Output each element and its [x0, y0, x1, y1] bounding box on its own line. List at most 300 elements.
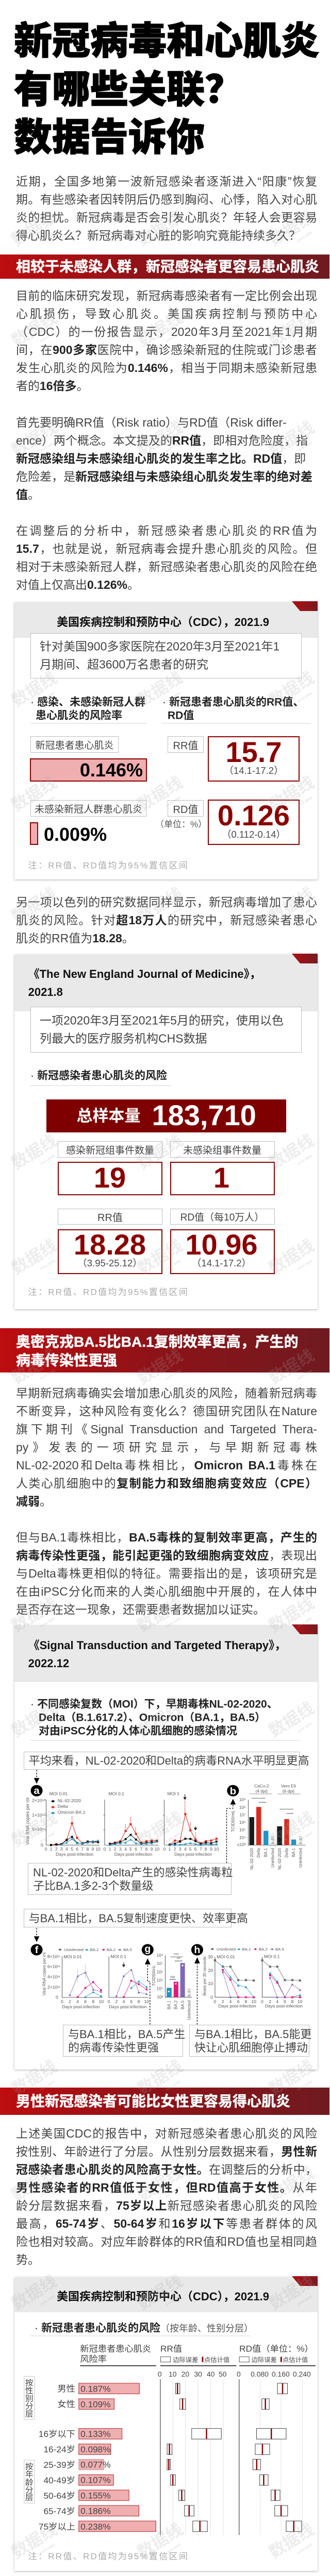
text: Israel study: [16, 895, 317, 945]
line charts f: 8: [138, 1999, 140, 2004]
bar chart g: TCID50/mL: [152, 1965, 156, 1986]
line chart MOI 0.1: 10: [155, 1846, 159, 1852]
text: BA.5: 与Delta毒株更相似的特征。需要指出的是，该项研究是: [16, 1566, 317, 1580]
watermarks: 数据线: [134, 2163, 186, 2205]
line chart MOI 0.01: Viral RNA copies per ml: [25, 1798, 30, 1845]
text: adjusted analysis: 相对于未感染新冠人群，新冠感染者患心肌炎的风险在绝: [16, 560, 317, 573]
icon h: h: [194, 1945, 200, 1956]
line chart MOI 0.01: NL-02-2020: [58, 1798, 81, 1803]
panel: Signal Transduction 2022.12: [14, 1625, 318, 2070]
title: [13, 20, 320, 159]
watermarks: DATA WIRE: [40, 692, 56, 703]
subheading: 新冠患者患心肌炎的风险（按年龄、性别分层）: [41, 2323, 253, 2334]
section heading 3: 男性新冠感染者可能比女性更容易得心肌炎: [16, 2093, 290, 2109]
watermarks: 数据线: [134, 668, 186, 710]
table headers: 0.240: [293, 2370, 311, 2378]
watermarks: DATA WIRE: [40, 1260, 56, 1271]
watermarks: 数据线: [134, 1346, 186, 1387]
line chart MOI 1: 5: [189, 1846, 192, 1852]
bar chart g: ns: [170, 1975, 175, 1979]
row: female: 0.109%: [80, 2400, 111, 2409]
watermarks: DATA WIRE: [297, 1260, 313, 1271]
label: RD值（每10万人）: [180, 1212, 264, 1223]
row: 25-39: 25-39岁: [43, 2460, 75, 2470]
total sample: [46, 1099, 286, 1132]
subheading: ·: [35, 2323, 38, 2334]
text: CDC report: 间，在900多家医院中，确诊感染新冠的住院或门诊患者: [16, 343, 317, 357]
text: sex and age: 冠感染者患心肌炎的风险高于女性。在调整后的分析中，: [16, 2163, 317, 2176]
subheading: ·: [30, 1070, 34, 1082]
watermarks: 数据线: [266, 1594, 317, 1635]
bar chart g: 10⁵: [157, 1978, 163, 1982]
line charts h: BA.2: [259, 1947, 268, 1952]
bar: uninfected 0.009%: [30, 822, 38, 845]
side label: by sex: [24, 2376, 35, 2419]
table headers: 新冠患者患心肌炎: [80, 2344, 151, 2354]
table headers: 边际误差: [252, 2357, 277, 2363]
line charts h: 0: [214, 1999, 217, 2004]
line charts h: 10: [251, 1999, 256, 2004]
watermarks: DATA WIRE: [297, 2295, 313, 2307]
value 1: 1: [213, 1161, 229, 1194]
callout: infectivity: 与BA.1相比，BA.5产生: [68, 2028, 185, 2041]
watermarks: 数据线: [266, 1131, 317, 1173]
study description: 一项2020年3月至2021年5月的研究，使用以色: [40, 1014, 284, 1027]
icon a: a: [34, 1785, 40, 1797]
text: BA.5: 在由iPSC分化而来的人类心肌细胞中开展的，在人体中: [16, 1585, 317, 1598]
line chart MOI 1: 0: [163, 1846, 166, 1852]
watermarks: DATA WIRE: [297, 2080, 313, 2092]
line charts f: 10: [99, 1999, 104, 2004]
watermarks: 数据线: [266, 1346, 317, 1387]
callout: beating: 快让心肌细胞停止搏动: [194, 2041, 308, 2054]
value 1: [170, 1162, 274, 1195]
line charts f: BA.2: [107, 1947, 116, 1952]
callout: beating: [189, 2025, 309, 2057]
value 19: [58, 1162, 162, 1195]
line charts h: BA.1: [242, 1947, 251, 1952]
bar chart b: NL-02-2020: [250, 1848, 254, 1870]
arrow to chart g: [145, 1958, 151, 2025]
watermarks: 数据线: [266, 208, 317, 249]
text: CDC report: 心肌损伤，导致心肌炎。美国疾病控制与预防中心: [16, 307, 317, 320]
line chart MOI 0.01: 2: [55, 1846, 58, 1852]
text: Israel study: 肌炎的风险。针对超18万人的研究中，新冠感染者患心: [16, 913, 317, 926]
table headers: 0.080: [251, 2370, 269, 2378]
line charts f: MOI 0.01: [63, 1954, 82, 1959]
intro text: 期。有些感染者因转阴后仍感到胸闷、心悸，陷入对心肌: [16, 193, 317, 206]
watermarks: DATA WIRE: [40, 2187, 56, 2198]
value RD: （0.112-0.14）: [222, 829, 286, 840]
bar chart b: 10⁶: [239, 1820, 246, 1825]
watermarks: DATA WIRE: [166, 442, 182, 453]
line charts h: Beats per 30 seconds: [202, 1956, 207, 1996]
line chart MOI 1: 4: [184, 1846, 187, 1852]
watermarks: DATA WIRE: [297, 231, 313, 243]
row: under 16: 0.133%: [80, 2429, 111, 2439]
bar chart g: **: [177, 1957, 180, 1961]
watermarks: DATA WIRE: [166, 2080, 182, 2092]
watermarks: DATA WIRE: [40, 1617, 56, 1629]
callout: RNA: 平均来看，NL-02-2020和Delta的病毒RNA水平明显更高: [29, 1754, 309, 1767]
subheading: 新冠感染者患心肌炎的风险: [37, 1070, 167, 1082]
text: CDC report: （CDC）的一份报告显示，2020年3月至2021年1月期: [16, 325, 317, 338]
row: 65-74: 65-74岁: [43, 2506, 75, 2516]
watermarks: DATA WIRE: [40, 332, 56, 343]
icon h: [191, 1944, 203, 1956]
bar chart b: Delta: [284, 1848, 289, 1858]
value RR: （14.1-17.2）: [224, 765, 284, 776]
section heading 1: 相较于未感染人群，新冠感染者更容易患心肌炎: [16, 259, 319, 275]
watermarks: DATA WIRE: [166, 796, 182, 808]
row: female: [57, 2399, 269, 2409]
section heading 2: [0, 1328, 329, 1372]
total sample: 183,710: [152, 1099, 256, 1131]
value 10.96: 10.96: [185, 1228, 258, 1261]
line chart MOI 0.01: 6: [76, 1846, 78, 1852]
bar chart b: 10⁴: [239, 1835, 246, 1840]
line charts f: BA.1: [90, 1947, 99, 1952]
text: CDC report: 发生心肌炎的风险为0.146%，相当于同期未感染新冠患: [16, 361, 317, 375]
watermarks: DATA WIRE: [166, 1832, 182, 1843]
text: RR and RD definitions: ence）两个概念。本文提及的RR值，即相对危险度，指: [16, 434, 308, 447]
callout: infectious particles: [28, 1863, 231, 1895]
watermarks: 数据线: [8, 884, 60, 926]
bar chart g: BA.1: [167, 2000, 171, 2009]
table headers: 0: [158, 2370, 162, 2378]
line charts h: 0: [210, 1995, 213, 1999]
watermarks: 数据线: [8, 1699, 60, 1740]
text: RR and RD definitions: 新冠感染组与未感染组心肌炎的发生率之比。RD值，即: [16, 452, 306, 465]
note: 注：RR值、RD值均为95%置信区间: [28, 2551, 189, 2562]
icon g: g: [144, 1944, 151, 1955]
callout: infectious particles: 子比BA.1多2-3个数量级: [33, 1879, 154, 1892]
note: 注：RR值、RD值均为95%置信区间: [28, 1287, 189, 1297]
watermarks: 数据线: [8, 1594, 60, 1635]
table headers: 30: [194, 2370, 202, 2378]
icon f: f: [35, 1945, 39, 1956]
value 18.28: 18.28: [74, 1228, 146, 1261]
row: 65-74: 0.186%: [80, 2506, 111, 2516]
line charts f: 0: [56, 1995, 58, 2000]
watermarks: 数据线: [134, 1594, 186, 1635]
watermarks: DATA WIRE: [297, 692, 313, 703]
line chart MOI 0.1: 0: [104, 1846, 106, 1852]
watermarks: 数据线: [266, 2163, 317, 2205]
line chart MOI 0.01: 0: [41, 1842, 43, 1848]
line chart MOI 0.01: [25, 1791, 101, 1857]
intro text: [16, 174, 317, 242]
callout: infectivity: [63, 2025, 183, 2057]
line chart MOI 0.1: Days post-infection: [114, 1852, 152, 1857]
line charts f: 6×10¹¹: [47, 1964, 60, 1969]
line chart MOI 1: 10: [214, 1846, 219, 1852]
line charts f: [42, 1947, 149, 2009]
watermarks: 数据线: [8, 2163, 60, 2205]
title: 新冠病毒和心肌炎: [14, 20, 319, 62]
panel heading: 《The New England Journal of Medicine》，: [28, 968, 261, 980]
watermarks: DATA WIRE: [166, 2187, 182, 2198]
label: 感染新冠组事件数量: [66, 1145, 154, 1156]
callout: RNA: [24, 1752, 300, 1770]
row: 25-39: [43, 2459, 260, 2470]
table headers: RR值: [160, 2344, 182, 2354]
watermarks: 数据线: [8, 1131, 60, 1173]
text: sex and age: 上述美国CDC的报告中，对新冠感染者患心肌炎的风险: [16, 2127, 317, 2140]
value 18.28: （3.95-25.12）: [77, 1258, 142, 1268]
line charts f: BA.5: [123, 1947, 132, 1952]
panel: Signal Transduction 2022.12: Delta（B.1.617.2）、Omicron（BA.1，BA.5）: [39, 1711, 266, 1724]
text: adjusted analysis: [16, 523, 317, 591]
bar chart b: Vero E6: [281, 1784, 296, 1788]
line chart MOI 0.01: 8: [87, 1846, 89, 1852]
line chart MOI 0.01: 5×10¹¹: [32, 1827, 45, 1832]
row: under 16: 16岁以下: [39, 2429, 75, 2439]
label: uninfected: [30, 800, 146, 817]
line chart MOI 0.1: 3: [119, 1846, 122, 1852]
icon f: [31, 1944, 43, 1956]
text: Nature study: 减弱。: [16, 1494, 52, 1507]
line chart MOI 0.1: 5: [129, 1846, 132, 1852]
text: RR and RD definitions: 首先要明确RR值（Risk ratio）与RD值（Risk differ-: [16, 416, 287, 429]
line charts f: 8: [92, 1999, 94, 2004]
bar chart g: Uninfected: [187, 2001, 191, 2020]
line charts h: 20: [208, 1968, 213, 1973]
line chart MOI 0.01: 10: [95, 1846, 101, 1852]
line charts f: 6: [130, 1999, 133, 2004]
text: sex and age: 按性别、年龄进行了分层。从性别分层数据来看，男性新: [16, 2144, 317, 2158]
label RR: [168, 736, 204, 753]
intro text: 近期，全国多地第一波新冠感染者逐渐进入“阳康”恢复: [16, 174, 317, 188]
risk table chart: [24, 2344, 316, 2535]
intro text: 得心肌炎么？新冠病毒对心脏的影响究竟能持续多久？: [16, 229, 301, 242]
watermarks: DATA WIRE: [40, 2544, 56, 2555]
watermarks: DATA WIRE: [297, 1155, 313, 1166]
row: over 75: 0.238%: [80, 2522, 111, 2532]
bar chart b: Uninfected: [298, 1848, 303, 1868]
watermarks: DATA WIRE: [40, 2295, 56, 2307]
watermarks: 数据线: [8, 208, 60, 249]
bar chart g: 10⁶: [157, 1970, 163, 1974]
text: Nature study: 早期新冠病毒确实会增加患心肌炎的风险，随着新冠病毒: [16, 1386, 317, 1399]
line chart MOI 1: 9: [210, 1846, 212, 1852]
watermarks: 数据线: [134, 1699, 186, 1740]
bar chart b: 10⁷: [239, 1813, 246, 1817]
line charts h: 8: [291, 1999, 294, 2004]
value RD: [208, 800, 300, 845]
watermarks: 数据线: [134, 1131, 186, 1173]
line chart MOI 0.01: Days post-infection: [56, 1852, 94, 1857]
text: BA.5: 病毒传染性更强，能引起更强的致细胞病变效应，表现出: [16, 1549, 317, 1562]
watermarks: DATA WIRE: [40, 908, 56, 919]
watermarks: DATA WIRE: [40, 2080, 56, 2092]
total sample: 总样本量: [76, 1107, 140, 1125]
line chart MOI 0.1: 6: [135, 1846, 137, 1852]
panel: CDC 2021.9 risk: [14, 602, 318, 879]
watermarks: DATA WIRE: [40, 442, 56, 453]
watermarks: 数据线: [134, 884, 186, 926]
table headers: RD值（单位：%）: [239, 2344, 314, 2354]
watermarks: 数据线: [266, 418, 317, 460]
value RR: [208, 736, 300, 782]
watermarks: 数据线: [134, 418, 186, 460]
row: 16-24: 0.098%: [80, 2445, 111, 2454]
text: Nature study: [16, 1386, 317, 1507]
row: over 75: [39, 2521, 302, 2532]
watermarks: 数据线: [8, 668, 60, 710]
panel: NEJM 2021.8: [14, 955, 318, 1309]
line chart MOI 1: 8: [205, 1846, 207, 1852]
watermarks: 数据线: [266, 884, 317, 926]
watermarks: DATA WIRE: [166, 692, 182, 703]
watermarks: 数据线: [8, 2272, 60, 2313]
watermarks: 数据线: [8, 2520, 60, 2562]
section heading 3: [0, 2088, 329, 2115]
study description: 列最大的医疗服务机构CHS数据: [40, 1031, 207, 1045]
value RD: 0.126: [218, 799, 290, 832]
line charts f: 4: [123, 1999, 125, 2004]
panel: CDC 2021.9 risk: RD值: [168, 710, 194, 721]
line charts h: Days post-infection: [218, 2004, 256, 2009]
text: RR and RD definitions: 值。: [16, 488, 40, 501]
row: under 16: [39, 2429, 286, 2439]
callout: BA.5 replication: [24, 1909, 232, 1927]
line charts f: 8×10¹¹: [47, 1954, 60, 1959]
line charts h: 4: [229, 1999, 232, 2004]
bar chart g: 10⁷: [157, 1961, 163, 1966]
bar chart b: b.d.l: [298, 1836, 303, 1844]
line charts f: 2: [69, 1999, 71, 2004]
watermarks: 数据线: [266, 1236, 317, 1278]
watermarks: DATA WIRE: [297, 2544, 313, 2555]
panel heading: 《Signal Transduction and Targeted Therapy》，: [28, 1639, 286, 1652]
line chart MOI 1: [163, 1791, 219, 1857]
text: sex and age: 势。: [16, 2252, 40, 2266]
table headers: 0: [237, 2370, 241, 2378]
text: Nature study: NL-02-2020和Delta毒株相比，Omicron BA.1毒株在: [16, 1458, 317, 1471]
bar chart b: BA.1: [263, 1848, 268, 1857]
callout: BA.5 replication: 与BA.1相比，BA.5复制速度更快、效率更高: [29, 1912, 248, 1925]
bar chart g: ***: [174, 1953, 179, 1957]
watermarks: 数据线: [134, 1236, 186, 1278]
label: uninfected: 未感染新冠人群患心肌炎: [35, 804, 142, 815]
subheading: ·: [30, 1698, 34, 1710]
arrow to chart h: [194, 1957, 200, 2025]
line chart MOI 1: 6: [194, 1846, 197, 1852]
line chart MOI 1: 2: [174, 1846, 176, 1852]
watermarks: 数据线: [8, 1808, 60, 1850]
text: CDC report: 目前的临床研究发现，新冠病毒感染者有一定比例会出现: [16, 289, 317, 302]
line chart MOI 0.01: 5: [71, 1846, 73, 1852]
line charts h: Days post-infection: [265, 2004, 303, 2009]
row: 25-39: 0.077%: [80, 2460, 111, 2470]
arrow to chart f: [34, 1928, 39, 1942]
line chart MOI 0.01: Omicron BA.1: [58, 1810, 86, 1815]
line charts h: 10: [298, 1999, 303, 2004]
line charts f: Days post-infection: [109, 2004, 147, 2009]
watermarks: DATA WIRE: [297, 796, 313, 808]
bar: infected 0.146%: [30, 758, 147, 782]
text: adjusted analysis: 15.7，也就是说，新冠病毒会提升患心肌炎的风险。但: [16, 542, 317, 555]
line chart MOI 0.1: 7: [140, 1846, 143, 1852]
bar chart b: Delta: [256, 1848, 261, 1858]
value 10.96: （14.1-17.2）: [192, 1258, 251, 1268]
side label: by age: 按: [25, 2463, 33, 2471]
side label: by sex: 分: [25, 2402, 33, 2411]
watermarks: 数据线: [134, 2272, 186, 2313]
label RR: RR值: [173, 740, 198, 751]
bar chart b: 10⁹: [239, 1798, 246, 1802]
line chart MOI 0.1: 8: [145, 1846, 148, 1852]
panel heading: 美国疾病控制和预防中心（CDC），2021.9: [57, 616, 269, 629]
watermarks: 数据线: [266, 668, 317, 710]
line charts f: Viral RNA copies per ml: [42, 1953, 47, 1995]
side label: by sex: 性: [25, 2386, 33, 2395]
value 0.009%: 0.009%: [44, 824, 107, 845]
row: female: 女性: [57, 2399, 75, 2409]
line charts f: 4: [76, 1999, 79, 2004]
subheading: risk rates: ·: [30, 696, 34, 708]
icon g: [142, 1944, 154, 1956]
table headers: 点估计值: [204, 2356, 229, 2363]
watermarks: DATA WIRE: [40, 796, 56, 808]
line chart MOI 0.01: 0: [45, 1846, 47, 1852]
text: BA.5: 但与BA.1毒株相比，BA.5毒株的复制效率更高，产生的: [16, 1530, 317, 1544]
study description: [30, 633, 302, 679]
study description: 月期间、超3600万名患者的研究: [40, 657, 208, 671]
value 18.28: [58, 1229, 162, 1274]
line chart MOI 0.01: 4: [65, 1846, 68, 1852]
line chart MOI 0.1: 9: [151, 1846, 153, 1852]
bar chart b: TCID50/mL: [230, 1810, 236, 1832]
side label: by age: 分: [25, 2486, 33, 2495]
line charts f: 2×10¹¹: [47, 1985, 60, 1990]
line chart MOI 0.01: 7: [81, 1846, 84, 1852]
line charts h: 30: [208, 1954, 213, 1959]
line charts f: 0: [61, 1999, 63, 2004]
row: male: 男性: [57, 2384, 75, 2394]
watermarks: 数据线: [266, 773, 317, 815]
label: infected: 新冠患者患心肌炎: [35, 740, 113, 751]
line charts h: MOI 0.01: [217, 1954, 235, 1959]
watermarks: DATA WIRE: [297, 1617, 313, 1629]
row: over 75: 75岁以上: [39, 2522, 75, 2532]
line charts h: 10: [208, 1981, 213, 1986]
watermarks: 数据线: [266, 2520, 317, 2562]
icons: woman and man: [0, 2555, 330, 2576]
watermarks: 数据线: [134, 2057, 186, 2098]
watermarks: DATA WIRE: [166, 332, 182, 343]
title: 数据告诉你: [14, 116, 205, 159]
watermarks: 数据线: [8, 418, 60, 460]
panel heading: 美国疾病控制和预防中心（CDC），2021.9: [57, 2290, 269, 2303]
row: 40-49: 0.107%: [80, 2476, 111, 2485]
line chart MOI 0.01: 9: [92, 1846, 94, 1852]
watermarks: 数据线: [266, 308, 317, 350]
callout: infectious particles: NL-02-2020和Delta产生的感染性病毒粒: [33, 1866, 233, 1879]
section heading 1: [0, 255, 329, 279]
text: sex and age: [16, 2127, 317, 2266]
watermarks: 数据线: [266, 2057, 317, 2098]
bar chart b: b.d.l: [270, 1836, 275, 1844]
callout: infectivity: 的病毒传染性更强: [68, 2041, 159, 2054]
line charts h: [202, 1947, 303, 2009]
line charts h: 2: [269, 1999, 271, 2004]
watermarks: 数据线: [266, 1699, 317, 1740]
line charts h: 0: [261, 1999, 263, 2004]
row: 16-24: [43, 2444, 270, 2454]
row: 40-49: [43, 2475, 268, 2485]
